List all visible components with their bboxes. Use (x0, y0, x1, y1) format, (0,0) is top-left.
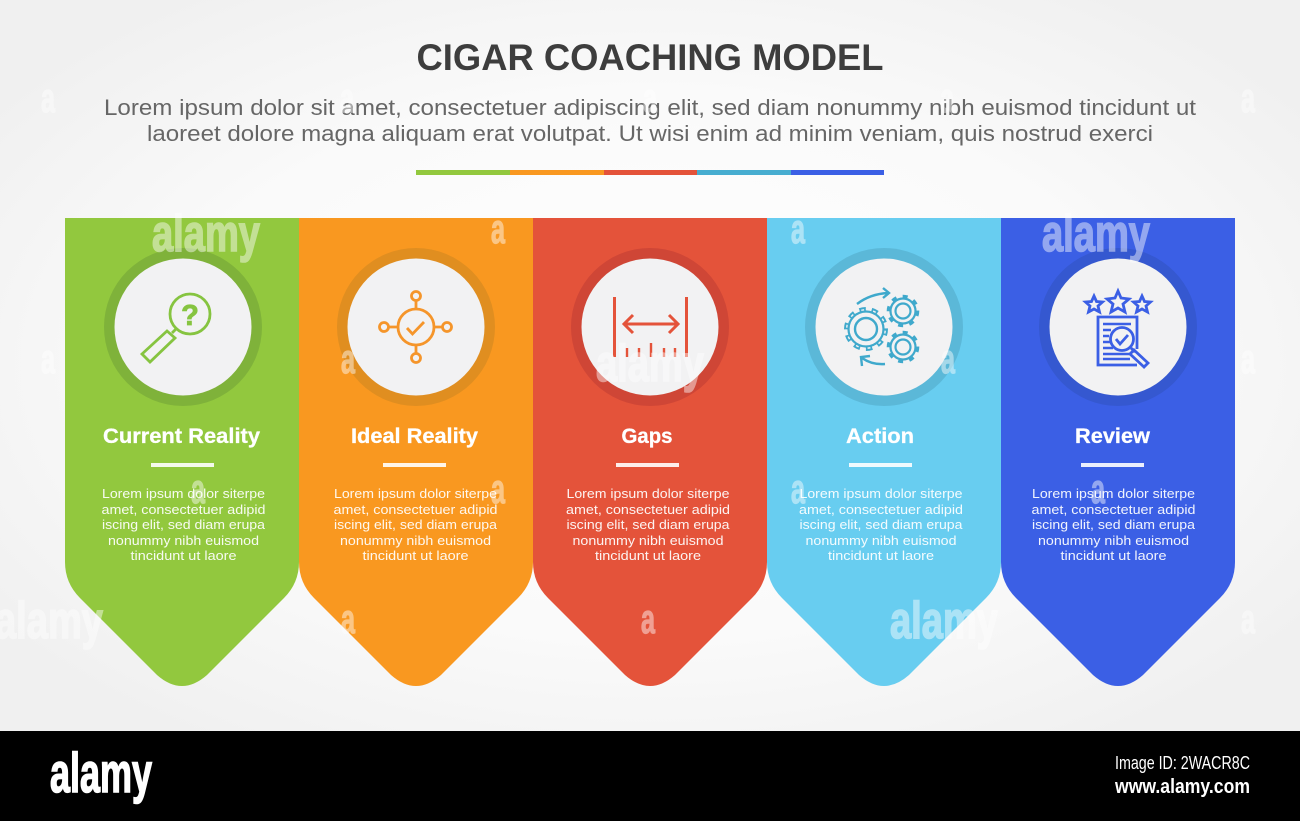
panel shape: red arrow (533, 218, 767, 686)
body text: iscing elit, sed diam erupa (800, 518, 963, 532)
icon ring (104, 248, 262, 406)
body text: Lorem ipsum dolor siterpe (800, 487, 963, 501)
underline (383, 463, 446, 467)
body text: Lorem ipsum dolor siterpe (566, 487, 730, 501)
icon: magnifier with question mark: ? (181, 300, 199, 332)
body text: nonummy nibh euismod (572, 534, 724, 548)
body text: iscing elit, sed diam erupa (566, 518, 730, 532)
underline (1081, 463, 1144, 467)
watermarks: a (1241, 336, 1256, 382)
watermarks: a (341, 596, 356, 642)
watermarks: a (491, 466, 506, 512)
watermarks: alamy (890, 592, 998, 650)
heading: Review (1075, 424, 1150, 448)
watermarks: a (341, 336, 356, 382)
footer bar (0, 731, 1300, 821)
footer logo: alamy (50, 741, 152, 804)
watermarks: a (41, 75, 56, 121)
icon: stars and document review (1086, 291, 1150, 367)
body text: tincidunt ut laore (595, 549, 701, 563)
title: CIGAR COACHING MODEL (416, 37, 884, 78)
watermarks: a (643, 75, 658, 121)
watermarks: a (1091, 466, 1106, 512)
subtitle text block: Lorem ipsum dolor sit amet, consectetuer adipiscing elit, sed diam nonummy nibh euismod tincidunt ut (104, 95, 1197, 120)
watermarks: a (791, 466, 806, 512)
body text (1032, 487, 1196, 563)
watermarks: a (340, 75, 355, 121)
panel: Current Reality (65, 218, 299, 686)
body text: tincidunt ut laore (828, 549, 934, 563)
underline (849, 463, 912, 467)
underline (616, 463, 679, 467)
watermarks: alamy (596, 335, 704, 393)
body text: nonummy nibh euismod (1038, 534, 1189, 548)
body text: amet, consectetuer adipid (334, 503, 498, 517)
body text: Lorem ipsum dolor siterpe (1032, 487, 1195, 501)
body text: nonummy nibh euismod (806, 534, 957, 548)
multicolor divider bar (416, 170, 884, 175)
body text: amet, consectetuer adipid (1032, 503, 1196, 517)
heading: Gaps (622, 424, 673, 448)
icon ring (337, 248, 495, 406)
body text (102, 487, 266, 563)
panel shape: blue arrow (1001, 218, 1235, 686)
icon ring (1039, 248, 1197, 406)
heading: Action (846, 424, 914, 448)
body text (799, 487, 963, 563)
watermarks: alamy (1042, 205, 1150, 263)
icon ring (571, 248, 729, 406)
icon disc (582, 258, 718, 396)
body text: amet, consectetuer adipid (102, 503, 266, 517)
website: www.alamy.com (1114, 776, 1250, 798)
panel: Action (767, 218, 1001, 686)
panel: Review (1001, 218, 1235, 686)
icon disc (816, 258, 952, 396)
heading: Ideal Reality (351, 424, 478, 448)
watermarks: a (940, 75, 955, 121)
body text: amet, consectetuer adipid (799, 503, 963, 517)
body text: tincidunt ut laore (1060, 549, 1167, 563)
icon ring (805, 248, 963, 406)
panel shape: light blue arrow (767, 218, 1001, 686)
watermarks: a (41, 336, 56, 382)
watermarks (0, 75, 1256, 650)
body text: Lorem ipsum dolor siterpe (102, 487, 265, 501)
panel shape: orange arrow (299, 218, 533, 686)
icon: magnifier with question mark (142, 294, 210, 362)
icon: network with check (380, 292, 452, 362)
body text: tincidunt ut laore (362, 549, 469, 563)
watermarks: a (1241, 596, 1256, 642)
icon: gap measurement (614, 297, 686, 357)
image id: Image ID: 2WACR8C (1115, 753, 1250, 773)
watermarks: a (791, 206, 806, 252)
body text: iscing elit, sed diam erupa (102, 518, 265, 532)
body text: iscing elit, sed diam erupa (334, 518, 497, 532)
underline (151, 463, 214, 467)
watermarks: a (191, 466, 206, 512)
body text (566, 487, 730, 563)
icon: gears with cycle arrows (846, 288, 917, 366)
body text (334, 487, 498, 563)
watermarks: a (491, 206, 506, 252)
watermarks: a (641, 596, 656, 642)
icon disc (348, 258, 484, 396)
panel: Gaps (533, 218, 767, 686)
body text: nonummy nibh euismod (340, 534, 491, 548)
body text: iscing elit, sed diam erupa (1032, 518, 1195, 532)
panel shape: green arrow (65, 218, 299, 686)
icon disc (114, 258, 252, 396)
body text: amet, consectetuer adipid (566, 503, 730, 517)
heading: Current Reality (103, 424, 260, 448)
icon disc (1050, 258, 1186, 396)
watermarks: alamy (152, 205, 260, 263)
body text: tincidunt ut laore (130, 549, 237, 563)
watermarks: a (941, 336, 956, 382)
body text: nonummy nibh euismod (108, 534, 259, 548)
subtitle text block (104, 95, 1197, 146)
subtitle text block: laoreet dolore magna aliquam erat volutpat. Ut wisi enim ad minim veniam, quis nostrud exerci (147, 121, 1153, 146)
watermarks: a (1241, 75, 1256, 121)
body text: Lorem ipsum dolor siterpe (334, 487, 497, 501)
panel: Ideal Reality (299, 218, 533, 686)
